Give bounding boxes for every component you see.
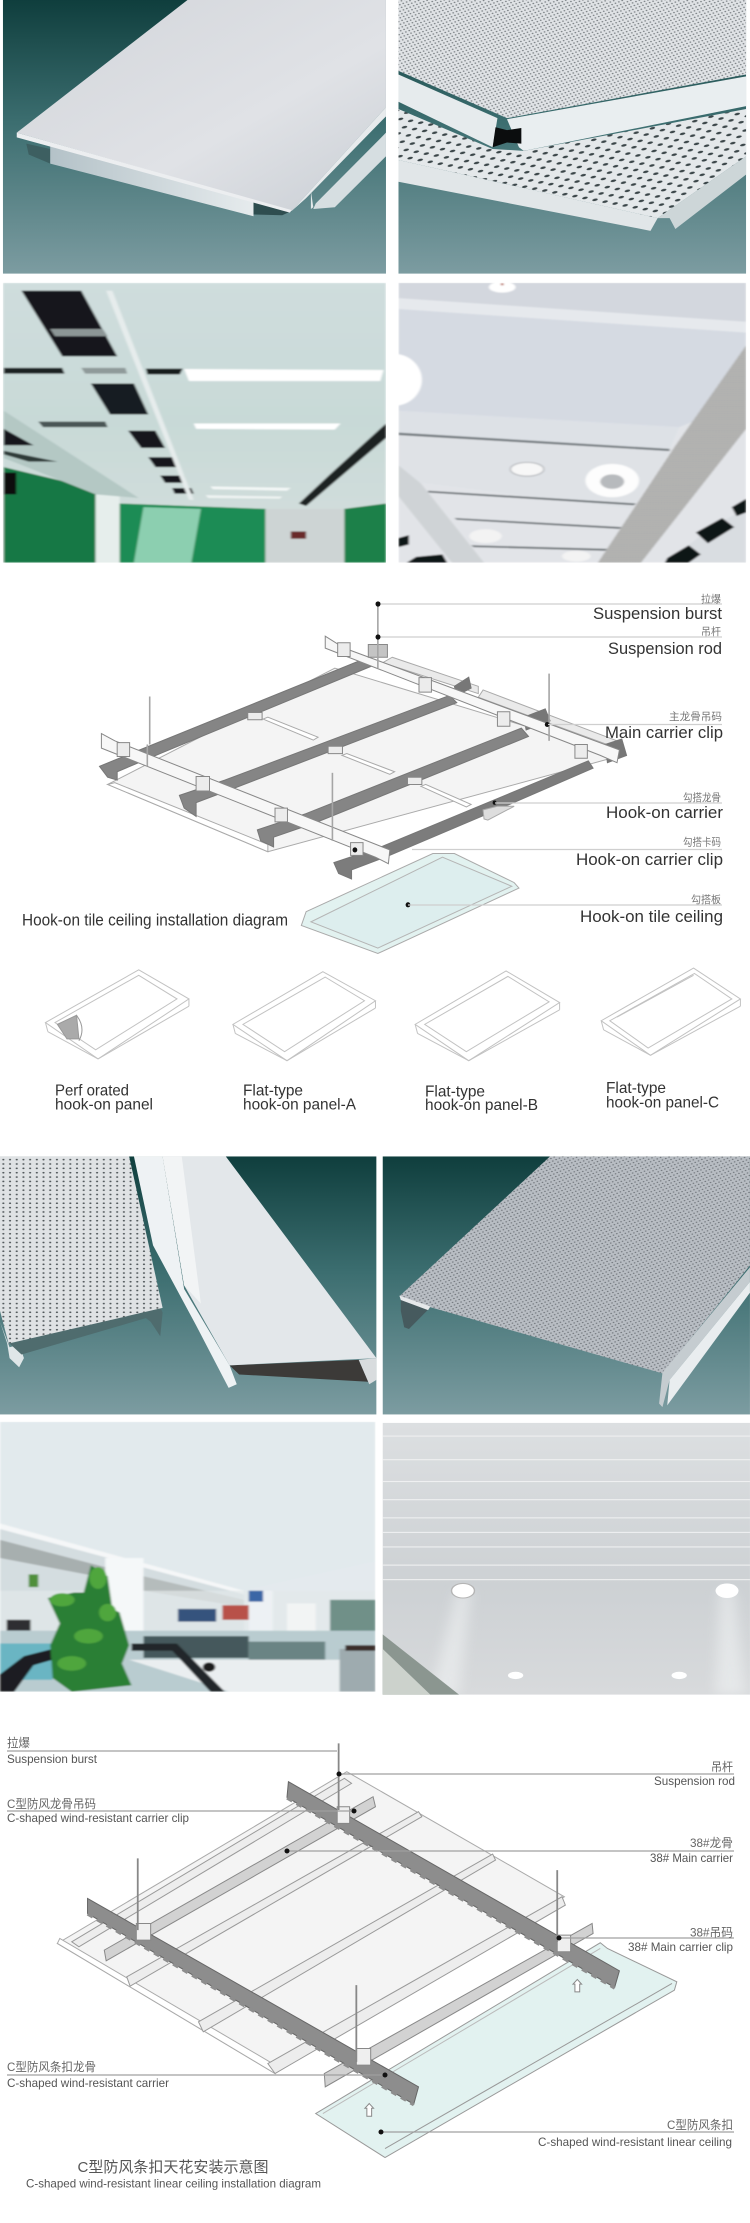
label: hook-on tile ceiling xyxy=(408,893,723,926)
exploded assembly drawing xyxy=(99,605,627,879)
panel: flat-type hook-on panel B xyxy=(415,971,560,1114)
label: suspension rod: Suspension rod xyxy=(654,1774,735,1788)
label: suspension rod: 吊杆 xyxy=(711,1760,733,1774)
label: hook-on tile ceiling: 勾搭板 xyxy=(691,893,721,906)
panel: perforated hook-on panel xyxy=(45,970,189,1113)
label: suspension burst: Suspension burst xyxy=(593,605,722,623)
label: C-shaped wind-resistant carrier clip xyxy=(7,1796,356,1825)
label: main carrier clip xyxy=(548,710,723,742)
label: 38# main carrier clip: 38#吊码 xyxy=(690,1926,733,1940)
label: suspension burst xyxy=(7,1735,337,1766)
exploded assembly drawing xyxy=(57,1743,677,2158)
photo: linear ceiling in shopping mall with plant xyxy=(0,1422,375,1692)
label: hook-on carrier xyxy=(495,791,724,822)
label: C-shaped wind-resistant carrier: C型防风条扣龙骨 xyxy=(7,2059,96,2074)
label: 38# main carrier: 38#龙骨 xyxy=(690,1836,733,1850)
diagram title: C型防风条扣天花安装示意图 xyxy=(78,2158,268,2176)
panel: flat-type hook-on panel C: Flat-type xyxy=(606,1080,666,1097)
label: C-shaped wind-resistant linear ceiling: C型防风条扣 xyxy=(667,2117,733,2132)
label: hook-on carrier clip: Hook-on carrier clip xyxy=(576,851,723,869)
label: hook-on carrier: Hook-on carrier xyxy=(606,804,724,822)
panel: flat-type hook-on panel B: Flat-type xyxy=(425,1084,485,1100)
section: hook-on ceiling installation diagram xyxy=(22,592,724,953)
panel: flat-type hook-on panel A: hook-on panel-A xyxy=(243,1096,356,1113)
panel types row xyxy=(45,968,740,1114)
label: 38# main carrier clip: 38# Main carrier clip xyxy=(628,1940,733,1954)
hook-on tile panel, cyan xyxy=(301,854,519,953)
label: suspension rod xyxy=(376,625,722,658)
panel: flat-type hook-on panel B: hook-on panel-B xyxy=(425,1097,538,1114)
label: C-shaped wind-resistant linear ceiling xyxy=(378,2117,734,2149)
diagram title: Hook-on tile ceiling installation diagram xyxy=(22,912,288,930)
diagram title: C-shaped wind-resistant linear ceiling installation diagram xyxy=(26,2176,321,2190)
photo: perforated C-shaped strip on teal xyxy=(383,1156,750,1414)
label: hook-on carrier clip xyxy=(412,836,723,869)
label: main carrier clip: Main carrier clip xyxy=(605,724,723,742)
panel: flat-type hook-on panel C: hook-on panel-C xyxy=(606,1094,719,1111)
section: C-shaped linear ceiling installation diagram xyxy=(7,1735,735,2190)
label: hook-on carrier: 勾搭龙骨 xyxy=(683,791,721,804)
label: C-shaped wind-resistant carrier clip: C-shaped wind-resistant carrier clip xyxy=(7,1811,189,1825)
photo: perforated square ceiling panels on teal xyxy=(398,0,746,274)
photo: installed ceiling with lights and perforated beams xyxy=(364,282,746,563)
photo: white linear ceiling with downlights xyxy=(383,1423,750,1695)
panel: perforated hook-on panel: hook-on panel xyxy=(55,1096,153,1113)
panel: flat-type hook-on panel C xyxy=(601,968,740,1111)
label: 38# main carrier xyxy=(284,1836,734,1865)
label: C-shaped wind-resistant carrier clip: C型防风龙骨吊码 xyxy=(7,1796,96,1811)
label: suspension burst: Suspension burst xyxy=(7,1752,98,1766)
label: C-shaped wind-resistant carrier: C-shaped wind-resistant carrier xyxy=(7,2076,169,2090)
photo: flat aluminium ceiling panel on teal xyxy=(3,0,386,274)
label: C-shaped wind-resistant carrier xyxy=(7,2059,388,2090)
label: hook-on carrier clip: 勾搭卡码 xyxy=(683,836,721,848)
label: C-shaped wind-resistant linear ceiling: C-shaped wind-resistant linear ceiling xyxy=(538,2135,732,2149)
label: main carrier clip: 主龙骨吊码 xyxy=(669,710,722,723)
label: suspension burst xyxy=(376,592,722,623)
diagram title xyxy=(26,2158,321,2190)
panel: flat-type hook-on panel A xyxy=(233,972,375,1113)
label: suspension rod xyxy=(336,1760,735,1788)
label: 38# main carrier clip xyxy=(556,1926,734,1954)
panel: flat-type hook-on panel A: Flat-type xyxy=(243,1083,303,1100)
panel: perforated hook-on panel: Perf orated xyxy=(55,1083,129,1100)
label: 38# main carrier: 38# Main carrier xyxy=(650,1851,733,1865)
label: hook-on tile ceiling: Hook-on tile ceiling xyxy=(580,908,723,926)
photo: installed ceiling in green-walled corridor xyxy=(3,283,386,563)
photo: perforated and plain C-shaped strips on teal xyxy=(0,1156,376,1414)
label: suspension rod: Suspension rod xyxy=(608,640,722,658)
label: suspension burst: 拉爆 xyxy=(701,592,721,606)
label: suspension rod: 吊杆 xyxy=(701,625,721,638)
label: suspension burst: 拉爆 xyxy=(7,1735,30,1750)
